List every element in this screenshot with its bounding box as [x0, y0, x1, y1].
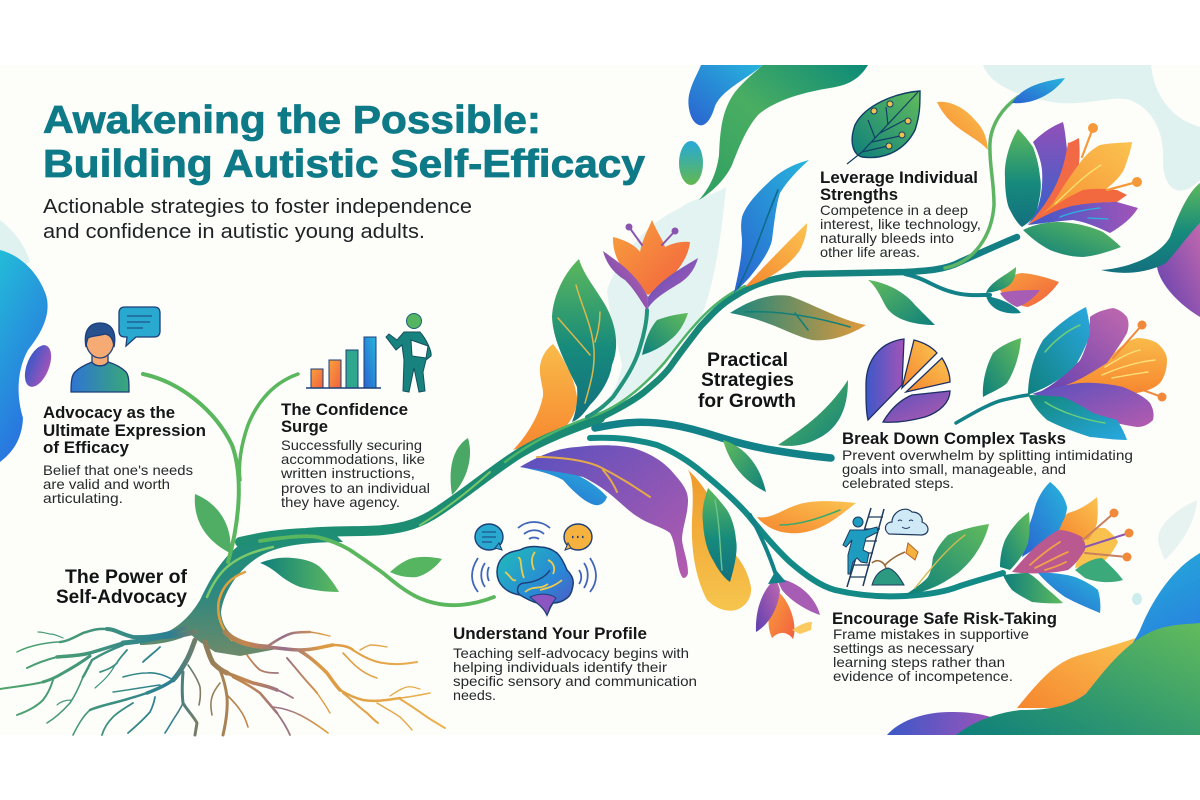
- vein blue tall: [738, 190, 778, 288]
- body: settings as necessary: [833, 640, 974, 656]
- light stripe on main vine: [420, 472, 490, 525]
- body: goals into small, manageable, and: [842, 461, 1066, 477]
- decorative blob: right edge purple: [1157, 223, 1200, 317]
- leaf: right of trunk: [260, 558, 339, 592]
- vein gold leaf: [780, 510, 840, 525]
- section label: power of self-advocacy: [56, 567, 188, 608]
- big purple leaf: [520, 445, 688, 578]
- title: Awakening the Possible:: [43, 99, 541, 142]
- vein blue petal: [1060, 208, 1108, 219]
- heading: [43, 404, 206, 457]
- body: evidence of incompetence.: [833, 668, 1013, 684]
- leaf: green near flower 3: [905, 524, 989, 595]
- title: Building Autistic Self-Efficacy: [43, 143, 645, 186]
- light green stripe on trunk: [207, 547, 273, 597]
- heading: Ultimate Expression: [43, 422, 206, 440]
- heading: [820, 169, 978, 204]
- subtitle: Actionable strategies to foster independence: [43, 195, 472, 218]
- body: [453, 645, 697, 703]
- blue underside of purple leaf: [520, 465, 607, 505]
- leaf: on main vine: [451, 438, 470, 495]
- icon: person with speech bubble: [71, 307, 160, 392]
- thin stem to blue leaf: [945, 97, 1018, 268]
- leaf: hanging right: [868, 280, 935, 325]
- large green leaf: [552, 259, 616, 422]
- flower: bottom right: [1000, 482, 1134, 613]
- light vein green leaf: [715, 500, 722, 570]
- body: Competence in a deep: [820, 202, 968, 218]
- gold vein of purple leaf: [537, 457, 650, 497]
- text: break down complex tasks: [842, 430, 1133, 491]
- plant illustration: [0, 78, 1167, 735]
- icon: rising bars with figure: [306, 314, 431, 392]
- decorative blob: right edge teal swoosh: [1101, 183, 1200, 273]
- secondary branch to bud: [905, 274, 990, 295]
- body: [820, 202, 981, 260]
- yellow hanging leaf: [688, 470, 751, 611]
- section label: practical strategies: for Growth: [698, 391, 796, 412]
- mid stem: [595, 422, 831, 458]
- decorative blob: bottom right: [887, 553, 1200, 735]
- heading: Understand Your Profile: [453, 625, 647, 643]
- body: Teaching self-advocacy begins with: [453, 645, 689, 661]
- flower: tulip: [756, 570, 820, 639]
- heading: The Confidence: [281, 401, 408, 419]
- decorative blob: left small oval: [20, 341, 56, 391]
- title: [43, 99, 645, 186]
- decorative blob: pale behind top flower: [598, 187, 726, 412]
- low stem: [590, 438, 1003, 596]
- body: articulating.: [43, 490, 123, 506]
- body: accommodations, like: [281, 451, 425, 467]
- top flower stem: [587, 310, 647, 417]
- flower: top left: [603, 220, 698, 310]
- decorative blob: pale top right: [983, 65, 1200, 191]
- body: naturally bleeds into: [820, 230, 954, 246]
- top stem: [590, 237, 1017, 423]
- decorative blob: left pale: [0, 220, 30, 275]
- leaf: mid left of flower 2: [983, 338, 1021, 397]
- section label: practical strategies: Strategies: [701, 370, 794, 391]
- main vine: [240, 418, 600, 542]
- flower: mid right: [1028, 307, 1167, 440]
- icon: climber, ladder, cloud and hill: [843, 508, 928, 587]
- body: specific sensory and communication: [453, 673, 697, 689]
- leaf: small on top flower stem: [642, 313, 688, 355]
- vein yellow petal: [1055, 165, 1101, 204]
- trunk and root crown: [140, 529, 343, 656]
- subtitle: and confidence in autistic young adults.: [43, 220, 425, 243]
- text: encourage safe risk-taking: [832, 610, 1057, 684]
- section label: practical strategies: [698, 350, 796, 412]
- veins of orange petal: [1102, 350, 1155, 378]
- leaf: blue top: [1012, 78, 1065, 103]
- text: confidence surge: [280, 401, 430, 510]
- vein broad leaf: [745, 312, 850, 330]
- body: other life areas.: [820, 244, 920, 260]
- green hanging leaf: [703, 488, 737, 582]
- body: Successfully securing: [281, 437, 422, 453]
- body: are valid and worth: [43, 476, 170, 492]
- section label: power of self-advocacy: The Power of: [65, 567, 188, 588]
- icon: split pie: [866, 339, 950, 422]
- body: [833, 626, 1029, 684]
- heading: Strengths: [820, 186, 898, 204]
- decorative blob: top blue: [688, 65, 763, 125]
- body: interest, like technology,: [820, 216, 981, 232]
- body: they have agency.: [281, 494, 400, 510]
- decorative blob: left blue: [0, 250, 48, 462]
- body: learning steps rather than: [833, 654, 1005, 670]
- leaf: left branch: [195, 494, 230, 553]
- body: [43, 462, 193, 506]
- heading: [281, 401, 408, 436]
- leaf: blue tall: [734, 160, 809, 293]
- section label: practical strategies: Practical: [707, 350, 788, 371]
- flower: top right: [1005, 122, 1142, 257]
- body: written instructions,: [280, 465, 415, 481]
- orange flame leaf: [513, 344, 577, 450]
- tulip stem: [750, 515, 776, 575]
- vein: [915, 535, 965, 588]
- heading: Encourage Safe Risk-Taking: [832, 610, 1057, 628]
- heading: Break Down Complex Tasks: [842, 430, 1066, 448]
- heading: Surge: [281, 418, 328, 436]
- body: needs.: [453, 687, 496, 703]
- decorative blob: top oval: [679, 141, 703, 185]
- body: proves to an individual: [281, 480, 430, 496]
- subtitle: [43, 195, 472, 243]
- text: understand your profile: [453, 625, 697, 703]
- icon: brain with sensory signals: [472, 522, 596, 615]
- leaf: gold: [757, 501, 856, 533]
- heading: Advocacy as the: [43, 404, 175, 422]
- heading: Leverage Individual: [820, 169, 978, 187]
- leaf: light green: [390, 557, 442, 577]
- body: Prevent overwhelm by splitting intimidating: [842, 447, 1133, 463]
- advocacy branch: [143, 374, 239, 562]
- heading: of Efficacy: [43, 439, 130, 457]
- body: [280, 437, 430, 510]
- body: Belief that one's needs: [43, 462, 193, 478]
- body: helping individuals identify their: [453, 659, 667, 675]
- leaf: broad green orange: [730, 295, 866, 340]
- light top edge of top stem: [505, 286, 745, 462]
- body: Frame mistakes in supportive: [833, 626, 1029, 642]
- decorative faint leaf: [1158, 500, 1197, 560]
- leaf: small orange: [745, 223, 807, 287]
- vein of large green leaf: [558, 285, 600, 403]
- body: celebrated steps.: [842, 475, 954, 491]
- confidence branch: [239, 374, 298, 480]
- body: [842, 447, 1133, 491]
- light green branch to understand: [260, 536, 494, 605]
- gold arc: [218, 572, 245, 640]
- roots: [0, 628, 445, 735]
- text: leverage individual strengths: [820, 169, 981, 260]
- icon: circuit leaf: [847, 91, 920, 164]
- section label: power of self-advocacy: Self-Advocacy: [56, 587, 187, 608]
- decorative blob: top green band: [699, 65, 868, 200]
- stem of flower 2: [956, 395, 1028, 423]
- flower: bud: [986, 267, 1059, 313]
- decorative droplet: [1132, 593, 1142, 605]
- leaf: up from mid stem: [778, 380, 848, 446]
- text: advocacy: [43, 404, 206, 506]
- leaf: hanging below mid stem: [723, 440, 766, 492]
- leaf: yellow top: [937, 102, 988, 150]
